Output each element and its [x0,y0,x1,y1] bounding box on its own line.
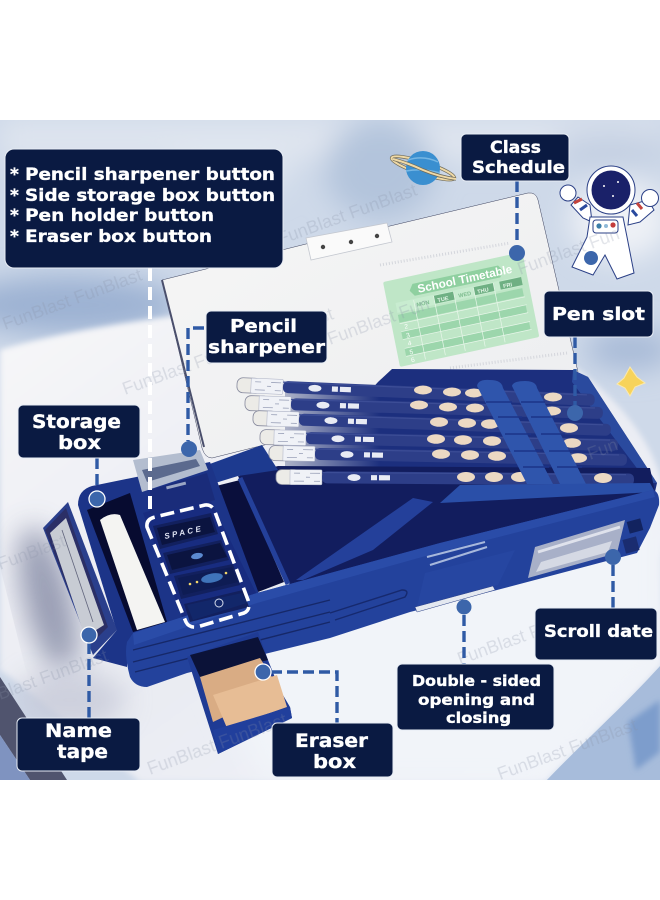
class schedule timetable: TUE [437,296,449,304]
label: pencil sharpener: Pencil [230,316,297,337]
pencil grip dots [410,386,612,483]
pencil sharpener cube [133,450,215,515]
lower-right cloth [545,664,660,782]
pencil tray [285,369,657,492]
class schedule timetable: FRI [503,282,513,290]
callout: buttons list: Eraser box button [25,227,212,247]
button strip [143,493,263,630]
label: scroll date [535,608,657,660]
watermarks: FunBlast FunBlast [145,710,290,779]
label: pen slot: Pen slot [552,304,645,325]
watermarks: FunBlast Fun [515,223,622,279]
callout: buttons list: Side storage box button [25,186,275,206]
metal hinge [415,586,495,612]
front bar [126,490,659,687]
leader: pen slot [567,337,583,421]
watermarks: FunBlast FunBlast FunBlast [120,304,336,399]
watermarks: FunBlast Fun [455,613,562,669]
label: double-sided opening and closing: closing [446,709,511,727]
class schedule timetable: School Timetable [416,263,514,296]
white dashed leader [148,268,152,512]
plaid cloth patches [0,120,660,370]
watermarks: FunBlast FunBlast [495,715,640,784]
leader: class schedule [509,181,525,261]
label: scroll date: Scroll date [544,622,653,642]
label: pen slot [544,291,653,337]
lower-left corner of table [0,677,67,780]
class schedule timetable [383,252,539,367]
label: pencil sharpener [206,311,327,363]
watermarks: FunBlast FunBlast [275,180,420,249]
watermarks: FunBlast FunBlast [0,265,145,334]
navy compartment [207,445,655,592]
leader: double-sided opening [456,600,472,664]
icon: star [617,367,645,396]
callout: buttons list: * [10,227,19,247]
background photo [0,120,660,782]
label: storage box [18,405,140,458]
shadow left of box [7,521,89,679]
class schedule timetable: MON [416,300,430,309]
callout: buttons list: * [10,165,19,185]
leader: scroll date [605,549,621,608]
callout: buttons list: Pencil sharpener button [25,165,275,185]
label: eraser box: Eraser [295,730,369,752]
scroll date window [528,518,643,578]
label: storage box: Storage [32,411,121,433]
case lid with clip [162,193,578,458]
label: double-sided opening and closing: opening and [418,691,535,709]
icon: planet [390,151,456,185]
label: name tape: Name [45,720,112,742]
four space buttons [153,513,249,622]
callout: buttons list [5,149,283,268]
six pencils [237,378,634,487]
four space buttons: SPACE [164,524,202,541]
leader: name tape [81,627,97,718]
class schedule timetable: 4 [407,340,413,348]
pencil clips [477,380,586,484]
label: class schedule: Class [490,138,541,158]
watermarks [0,180,640,784]
label: double-sided opening and closing [397,664,554,730]
label: storage box: box [58,432,101,454]
label: double-sided opening and closing: Double - sided [412,672,541,690]
callout: buttons list: Pen holder button [25,206,214,226]
case body [78,462,659,687]
class schedule timetable: 2 [404,323,409,331]
name tape flap [43,502,117,655]
class schedule timetable: 3 [406,332,411,340]
label: name tape [17,718,140,771]
label: name tape: tape [57,741,108,763]
white plate [0,300,660,782]
leader: eraser box [255,664,337,723]
class schedule timetable: 6 [411,357,416,364]
button strip dashed highlight [147,505,249,627]
leader: pencil sharpener [181,328,204,457]
pop-up eraser drawer [187,632,292,754]
label: class schedule [461,134,569,181]
watermarks: Fun [585,434,621,464]
class schedule timetable: THU [477,287,489,296]
label: eraser box [272,723,393,777]
callout: buttons list: * [10,186,19,206]
class schedule timetable: WED [458,291,472,300]
leader: storage box [89,458,105,507]
callout: buttons list: * [10,206,19,226]
class schedule timetable: 5 [409,349,414,356]
sloped panel and strut [296,483,655,580]
label: pencil sharpener: sharpener [208,337,325,358]
label: class schedule: Schedule [472,158,565,178]
label: eraser box: box [313,751,356,773]
watermarks: FunBlast Fun [325,293,432,349]
left tray [78,462,265,642]
icon: astronaut [560,166,658,279]
